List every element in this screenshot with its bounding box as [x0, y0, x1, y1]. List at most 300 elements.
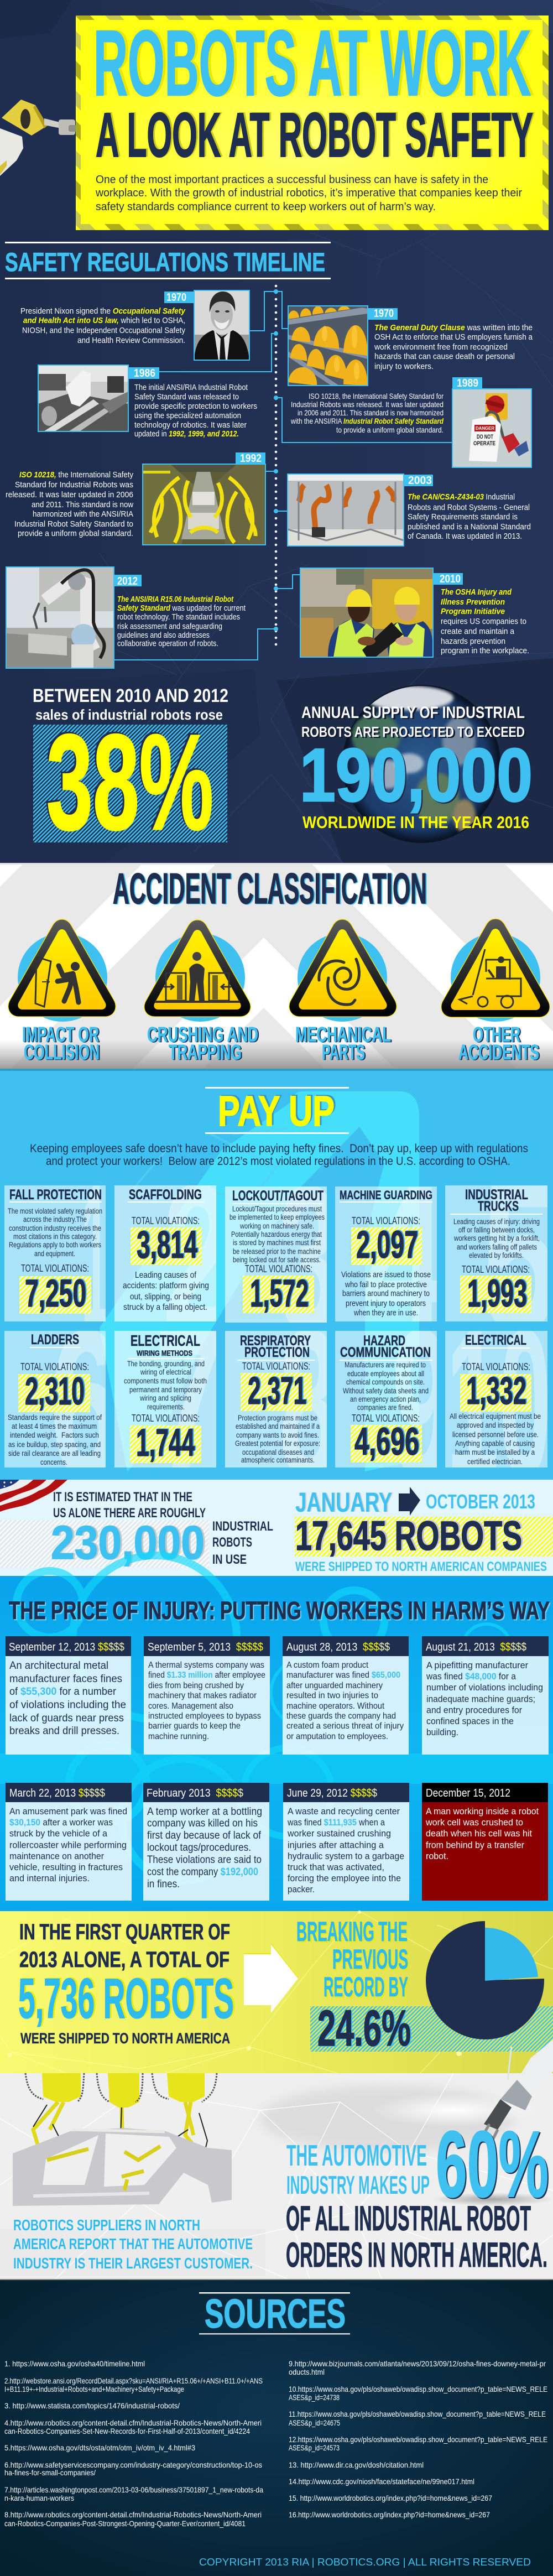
source list: right column: ASES&p_id=24573 — [289, 2443, 340, 2452]
source list: left column: I+B11.19+-+Industrial+Robots+and+Machinery+Safety+Package — [4, 2385, 184, 2393]
card description: workers getting hit by a forklift, — [453, 1234, 540, 1242]
text: initial ansi ria standard: technology of robotics. It was later — [134, 420, 247, 430]
label: impact or collision — [22, 1023, 100, 1064]
intro paragraph: One of the most important practices a successful business can have is safety in the — [96, 174, 488, 186]
violation total: TOTAL VIOLATIONS: — [132, 1413, 200, 1424]
description: A thermal systems company was — [148, 1661, 264, 1670]
description: instructed employees to bypass — [148, 1711, 261, 1721]
card: 9 hazard communication — [335, 1286, 452, 1521]
text: general duty clause: work environment free from recognized — [374, 342, 508, 352]
card description: across the industry.The — [23, 1215, 87, 1224]
card description: side rail clearance are all leading — [8, 1449, 101, 1458]
text: suppliers report automotive largest customer: ROBOTICS SUPPLIERS IN NORTH — [13, 2216, 200, 2234]
source list: right column — [289, 2359, 547, 2519]
description — [9, 1660, 126, 1737]
card description — [343, 1361, 429, 1412]
text: initial ansi ria standard — [134, 383, 257, 439]
label: impact or collision: IMPACT OR — [22, 1023, 99, 1047]
icon: mechanical parts — [289, 919, 397, 1064]
text: iso 10218: harmonized with the ANSI/RIA — [33, 509, 133, 519]
label: crushing and trapping — [147, 1023, 258, 1064]
source list: right column: 13. http://www.dir.ca.gov/dosh/citation.html — [289, 2460, 424, 2469]
description: confined spaces in the — [426, 1716, 514, 1726]
description: inadequate machine guards; — [426, 1694, 535, 1704]
stat: 24.6 percent — [310, 2000, 553, 2057]
card description: being locked out for safe access. — [233, 1256, 321, 1264]
description: number of violations including — [426, 1682, 543, 1693]
text: can csa z434 — [408, 492, 531, 541]
card description: Violations are issued to those — [341, 1271, 431, 1279]
fine card: september 5, 2013 — [144, 1636, 270, 1755]
panel: robot arm holding header sign — [0, 100, 86, 176]
card description: who fail to place protective — [345, 1281, 427, 1289]
card description: Greatest potential for exposure: — [235, 1439, 320, 1448]
stat: 38 percent sales rise — [33, 685, 228, 858]
text: iso 10218 released: ISO 10218, the International Safety Standard for — [309, 392, 444, 400]
text: iso 10218 released: to provide a uniform global standard. — [336, 425, 444, 434]
year badge: 2012: 2012 — [117, 575, 138, 587]
card description: Manufacturers are required to — [345, 1361, 426, 1369]
card description: company wants to avoid fines. — [236, 1431, 319, 1439]
panel: us robots in use and shipments — [0, 1480, 553, 1576]
text: in the first quarter — [19, 1920, 230, 1972]
violation total — [460, 1264, 531, 1315]
description — [147, 1806, 262, 1890]
card description: as ice buildup, step spacing, and — [8, 1440, 101, 1449]
text: in the first quarter: 2013 ALONE, A TOTAL OF — [19, 1948, 229, 1972]
text: ansi ria r15.06: guidelines and also addresses — [117, 631, 210, 640]
description: barrier guards to keep the — [148, 1721, 241, 1731]
description: these guards the company had — [286, 1711, 396, 1721]
text: industrial robots in use — [212, 1519, 273, 1567]
timeline entry: 1989 — [290, 377, 531, 467]
violation total — [131, 1215, 202, 1266]
label: crushing and trapping: CRUSHING AND — [147, 1023, 258, 1047]
description — [287, 1806, 404, 1895]
text: iso 10218: provide a uniform global standard. — [18, 529, 133, 538]
card description: atmospheric contaminants. — [241, 1456, 315, 1464]
card description — [450, 1412, 541, 1466]
card heading: INDUSTRIAL — [465, 1187, 528, 1203]
description: death when his cell was hit — [426, 1828, 532, 1839]
year badge: 1986: 1986 — [134, 367, 155, 379]
date and fine rating: March 22, 2013 $$$$$ — [9, 1787, 105, 1799]
card description: is stored by machines must first — [233, 1238, 321, 1247]
description: of $55,300 for a number — [9, 1686, 117, 1698]
description: injuries after attaching a — [288, 1840, 384, 1850]
card heading — [462, 1333, 530, 1349]
card description: educate employees about all — [347, 1370, 424, 1378]
date and fine rating: August 21, 2013 $$$$$ — [426, 1641, 526, 1653]
text: ansi ria r15.06: robot technology. The standard includes — [117, 612, 240, 622]
text: general duty clause: injury to workers. — [374, 362, 434, 371]
text: estimated number: US ALONE THERE ARE ROUGHLY — [53, 1506, 206, 1521]
description — [9, 1806, 127, 1883]
description: A waste and recycling center — [288, 1806, 400, 1817]
card heading — [450, 1187, 542, 1215]
card description: Leading causes of — [135, 1271, 196, 1280]
card description — [8, 1413, 102, 1466]
source list: left column: 4.http://www.robotics.org/content-detail.cfm/Industrial-Robotics-News/North-Ameri — [4, 2418, 262, 2427]
card heading: HAZARD — [363, 1333, 405, 1349]
violation total — [460, 1361, 531, 1412]
violation total — [130, 1413, 201, 1464]
description: machine running. — [148, 1732, 209, 1741]
source list: left column: 3. http://www.statista.com/topics/1476/industrial-robots/ — [4, 2401, 180, 2410]
card heading: LADDERS — [31, 1332, 79, 1347]
source list: left column: n-kara-human-workers — [4, 2494, 74, 2502]
violation total: 2,310 — [25, 1370, 85, 1413]
card description: established and maintained if a — [236, 1422, 320, 1430]
stat: 230,000: 230,000 — [51, 1517, 205, 1569]
description: work cell was crushed to — [425, 1817, 523, 1828]
card description: off or falling between docks, — [458, 1226, 535, 1234]
description: hydraulic system to a garbage — [288, 1851, 404, 1861]
description: cores. Management also — [148, 1701, 233, 1711]
label: impact or collision: COLLISION — [24, 1041, 100, 1064]
card description: Standards require the support of — [8, 1413, 102, 1422]
text: initial ansi ria standard: The initial ANSI/RIA Industrial Robot — [134, 383, 248, 392]
year badge: 2010: 2010 — [440, 573, 461, 585]
text: breaking the previous record — [296, 1916, 408, 2002]
violation total: 2,097 — [356, 1223, 418, 1266]
panel: yellow hazard title sign — [76, 11, 549, 230]
text: osha injury and illness program: program in the workplace. — [441, 646, 529, 655]
photo: workers in hard hats with clipboard — [301, 569, 432, 657]
text: osha injury and illness program — [441, 587, 529, 655]
source list: left column — [4, 2359, 263, 2528]
text: breaking the previous record: RECORD BY — [324, 1971, 408, 2002]
card description: and equipment. — [34, 1250, 75, 1258]
intro paragraph: safety standards compliance current to keep workers out of harm’s way. — [96, 201, 436, 213]
photo: collaborative robot arm — [7, 568, 113, 668]
description: resulted in two injuries to — [286, 1691, 378, 1700]
violation total — [19, 1263, 91, 1315]
text: industrial robots in use: IN USE — [212, 1552, 247, 1567]
card heading: SCAFFOLDING — [129, 1187, 202, 1203]
panel: price of injury background — [0, 1555, 553, 1911]
description: breaks and drill presses. — [9, 1725, 119, 1737]
text: iso 10218 released — [290, 392, 444, 434]
panel: automotive grey section — [0, 2073, 553, 2280]
violation total: TOTAL VIOLATIONS: — [352, 1413, 420, 1424]
text: january to october 2013 — [295, 1487, 535, 1518]
date: December 15, 2012 — [426, 1787, 510, 1799]
icon: earth globe — [342, 685, 500, 843]
text: ansi ria r15.06 — [117, 595, 246, 648]
caption: shipped to north america: WERE SHIPPED TO NORTH AMERICA — [20, 2030, 230, 2047]
source list: left column: 2.http://webstore.ansi.org/RecordDetail.aspx?sku=ANSI/RIA+R15.06+/+ANSI+B11.0+/+ANS — [4, 2376, 263, 2385]
card heading: TRUCKS — [478, 1199, 519, 1214]
subheading: sales rose: sales of industrial robots rose — [35, 706, 223, 723]
panel: sources — [0, 2279, 553, 2576]
text: general duty clause — [374, 323, 533, 371]
card description: construction industry receives the — [9, 1224, 101, 1232]
violation total: TOTAL VIOLATIONS: — [352, 1215, 420, 1226]
description: An amusement park was fined — [9, 1806, 127, 1817]
icon: other accidents forklift — [441, 919, 550, 1064]
timeline entry: 1970 general duty clause — [288, 306, 533, 386]
text: estimated number — [53, 1490, 206, 1521]
photo: president nixon — [195, 291, 249, 360]
description: from behind by a transfer — [426, 1840, 524, 1850]
card description: when they are in use. — [353, 1309, 418, 1318]
text: ansi ria r15.06: collaborative operation of robots. — [117, 639, 218, 648]
description: after unguarded machinery — [286, 1681, 383, 1690]
description: machine operators. Without — [286, 1701, 384, 1711]
car body shell — [13, 2128, 232, 2206]
card description: and workers falling off pallets — [457, 1243, 537, 1251]
icon: crushing and trapping — [144, 920, 258, 1064]
card description: prevent injury to operators — [346, 1299, 426, 1308]
card description: most citations in this category. — [13, 1232, 97, 1241]
description: struck by the vehicle of a — [9, 1828, 108, 1839]
text: iso 10218 released: with the ANSI/RIA Industrial Robot Safety Standard — [290, 417, 444, 425]
year badge: 2003: 2003 — [408, 475, 432, 487]
intro paragraph: workplace. With the growth of industrial robotics, it’s imperative that companies keep their — [95, 187, 522, 199]
description: robot. — [426, 1851, 448, 1861]
source list: left column: 7.http://articles.washingtonpost.com/2013-03-06/business/37501897_1_new-robots-da — [4, 2485, 263, 2494]
text: suppliers report automotive largest customer: INDUSTRY IS THEIR LARGEST CUSTOMER. — [13, 2255, 253, 2272]
card description — [229, 1205, 325, 1264]
violation total — [243, 1263, 314, 1315]
text: ansi ria r15.06: The ANSI/RIA R15.06 Industrial Robot — [117, 595, 234, 604]
year badge: 1970: 1970 — [166, 292, 186, 304]
photo: danger lockout tag: DANGER — [476, 426, 494, 431]
fine card: june 29, 2012 — [283, 1783, 409, 1901]
card description: wiring of electrical — [140, 1368, 191, 1376]
card heading: LOCKOUT/TAGOUT — [232, 1188, 324, 1204]
panel: accident classification background — [0, 863, 553, 1071]
text: ansi ria r15.06: risk assessment and safeguarding — [117, 622, 222, 631]
text: breaking the previous record: BREAKING THE — [296, 1916, 408, 1947]
timeline entry: 2010 — [300, 568, 529, 657]
text: iso 10218 released: Industrial Robots was released. It was later updated — [291, 400, 444, 409]
panel: navy header and timeline background — [0, 0, 553, 865]
description: $30,150 after a worker was — [9, 1817, 113, 1828]
source list: left column: 5.https://www.osha.gov/dts/osta/otm/otm_iv/otm_iv_4.html#3 — [4, 2443, 195, 2452]
card description: occupational diseases and — [242, 1448, 314, 1456]
card description — [123, 1271, 209, 1312]
card description: requirements. — [147, 1403, 185, 1411]
text: pay up intro: and protect your workers! Below are 2012’s most violated regulations in the U.S. according to OSHA. — [46, 1155, 510, 1168]
source list: left column: 8.http://www.robotics.org/content-detail.cfm/Industrial-Robotics-News/North-Ameri — [4, 2510, 262, 2519]
card heading: ELECTRICAL — [131, 1332, 200, 1349]
card description: at least 4 times the maximum — [12, 1422, 97, 1430]
violation total — [18, 1361, 90, 1413]
description: maintenance on another — [9, 1851, 104, 1861]
fatality card: december 15, 2012 — [422, 1783, 548, 1901]
description: cost the company $192,000 — [147, 1866, 258, 1878]
card description: barriers around machinery to — [342, 1289, 430, 1298]
card description: be released prior to the machine — [233, 1247, 321, 1256]
card: 8 respiratory protection — [225, 1286, 340, 1521]
heading: safety regulations timeline — [5, 242, 331, 279]
card description: permanent and temporary — [129, 1386, 202, 1394]
card description: Without safety data sheets and — [343, 1387, 429, 1395]
violation total: TOTAL VIOLATIONS: — [242, 1361, 310, 1372]
stat: automotive 60 percent — [286, 2112, 553, 2275]
description: packer. — [288, 1884, 315, 1895]
icon: impact or collision — [8, 919, 116, 1064]
card description — [124, 1360, 207, 1411]
card description: companies are fined. — [357, 1403, 413, 1412]
label: mechanical parts: MECHANICAL — [295, 1023, 391, 1047]
card description — [453, 1217, 540, 1260]
description: was fined $111,935 when a — [287, 1817, 385, 1828]
heading: safety regulations timeline: SAFETY REGULATIONS TIMELINE — [5, 248, 325, 277]
source list: left column: 6.http://www.safetyservicescompany.com/industry-category/construction/top-10-os — [4, 2460, 262, 2469]
label: crushing and trapping: TRAPPING — [169, 1041, 242, 1064]
description: vehicle, resulting in fractures — [9, 1862, 123, 1872]
source list: right column: ASES&p_id=24738 — [289, 2393, 340, 2402]
card: 5 industrial trucks — [445, 1140, 553, 1375]
description: dies from being crushed by — [148, 1681, 244, 1690]
card description: The bonding, grounding, and — [127, 1360, 205, 1368]
card: 3 lockout tagout — [225, 1141, 340, 1376]
text: initial ansi ria standard: using the specialized automation — [134, 411, 241, 420]
text: osha injury and illness program: requires US companies to — [441, 617, 526, 626]
stat: 24.6 percent: 24.6% — [317, 2000, 411, 2057]
photo: danger lockout tag: DO NOT — [477, 434, 493, 440]
label: mechanical parts — [295, 1023, 391, 1064]
fine card: february 2013 — [143, 1783, 269, 1901]
text: can csa z434: published and is a National Standard — [408, 522, 531, 532]
source list: left column: can-Robotics-Companies-Set-New-Records-for-First-Half-of-2013/content_id/4224 — [4, 2427, 250, 2436]
text: osha injury and illness program: The OSHA Injury and — [441, 587, 512, 597]
text: the automotive industry makes up — [286, 2139, 430, 2199]
illustration: robot arm gripper — [480, 2039, 553, 2146]
card description — [8, 1207, 102, 1258]
text: industrial robots in use: INDUSTRIAL — [212, 1519, 273, 1534]
card heading: FALL PROTECTION — [9, 1187, 102, 1203]
source list: left column: 1. https://www.osha.gov/osha40/timeline.html — [4, 2359, 145, 2368]
panel: first quarter 2013 yellow band — [0, 1911, 553, 2073]
card heading: MACHINE GUARDING — [340, 1188, 432, 1202]
text: general duty clause: hazards that can cause death or personal — [374, 352, 515, 361]
text: iso 10218: Standard for Industrial Robots was — [15, 480, 133, 490]
description: fined $1.33 million after employee — [148, 1671, 265, 1680]
description: worker sustained crushing — [287, 1828, 391, 1839]
card: 1 fall protection — [4, 1140, 109, 1375]
card description: struck by a falling object. — [123, 1303, 207, 1312]
text: the automotive industry makes up: THE AUTOMOTIVE — [286, 2139, 427, 2172]
card description: chemical compounds on site. — [346, 1378, 425, 1386]
card heading: RESPIRATORY — [240, 1333, 311, 1349]
description: lockout tags/procedures. — [147, 1842, 251, 1854]
text: initial ansi ria standard: provide specific protection to workers — [134, 402, 257, 411]
timeline entry: 1970 Nixon — [20, 290, 249, 360]
description: truck that was activated, — [288, 1862, 384, 1872]
panel: pay up background — [0, 1071, 553, 1480]
heading: sources: SOURCES — [205, 2292, 346, 2336]
source list: left column: ha-fines-for-small-companies/ — [4, 2468, 96, 2477]
description: of violations including the — [9, 1699, 126, 1711]
card description: Protection programs must be — [238, 1414, 317, 1422]
description: A temp worker at a bottling — [147, 1806, 262, 1818]
description: lack of guards near press — [9, 1713, 124, 1724]
card description: be implemented to keep employees — [229, 1213, 325, 1221]
card heading — [237, 1333, 315, 1361]
label: mechanical parts: PARTS — [322, 1041, 365, 1064]
text: iso 10218 released: in 2006 and 2011. This standard is now harmonized — [298, 408, 444, 417]
chart: pie 24.6 percent — [426, 1921, 544, 2039]
card description — [235, 1414, 320, 1464]
footer: copyright: COPYRIGHT 2013 RIA | ROBOTICS.ORG | ALL RIGHTS RESERVED — [199, 2557, 531, 2568]
card description: Anything capable of causing — [455, 1439, 535, 1448]
violation total: TOTAL VIOLATIONS: — [245, 1263, 312, 1274]
text: ansi ria r15.06: Safety Standard was updated for current — [117, 603, 246, 613]
fine card: august 28, 2013 — [283, 1636, 409, 1755]
card description: elevated by forklifts. — [469, 1251, 524, 1260]
text: nixon signs act: and Health Review Commission. — [77, 336, 185, 345]
text: nixon signs act: NIOSH, and the Independent Occupational Safety — [22, 326, 185, 335]
text: can csa z434: Safety Requirements standard is — [408, 512, 518, 522]
text: nixon signs act: President Nixon signed the Occupational Safety — [20, 306, 186, 316]
intro paragraph — [95, 174, 522, 213]
arrow: white pointing right — [244, 1944, 298, 2013]
text: suppliers report automotive largest customer — [13, 2216, 253, 2272]
photo: black and white industrial robot — [39, 366, 128, 431]
photo: orange robots in cell — [288, 475, 403, 545]
description: An architectural metal — [9, 1660, 108, 1672]
violation total: TOTAL VIOLATIONS: — [20, 1361, 89, 1372]
date and fine rating: September 12, 2013 $$$$$ — [9, 1641, 124, 1653]
description — [425, 1806, 539, 1861]
fine card: september 12, 2013 — [6, 1636, 131, 1755]
description: A man working inside a robot — [426, 1806, 539, 1817]
source list: right column: oducts.html — [289, 2367, 325, 2376]
description: and internal injuries. — [9, 1873, 90, 1883]
description: A custom foam product — [286, 1661, 368, 1670]
card heading: PROTECTION — [244, 1345, 310, 1360]
description — [286, 1661, 404, 1741]
card description — [341, 1271, 431, 1318]
photo: danger lockout tag: OPERATE — [473, 440, 495, 447]
description: forcing the employee into the — [288, 1873, 401, 1883]
fine card: march 22, 2013 — [6, 1783, 132, 1901]
text: osha injury and illness program: hazards prevention — [441, 637, 505, 646]
violation total: 3,814 — [137, 1223, 197, 1266]
timeline entry: 1992 — [6, 452, 265, 545]
text: iso 10218: and 2011. This standard is now — [32, 500, 133, 509]
heading: annual supply — [301, 704, 525, 740]
violation total: 1,744 — [136, 1421, 195, 1464]
card: 2 scaffolding — [114, 1140, 234, 1375]
card description: certified electrician. — [467, 1458, 523, 1466]
date and fine rating: June 29, 2012 $$$$$ — [287, 1787, 377, 1799]
description: manufacturer faces fines — [9, 1673, 122, 1685]
text: nixon signs act: and Health Act into US law, which led to OSHA, — [23, 316, 185, 325]
card description: Regulations apply to both workers — [9, 1241, 101, 1249]
source list: right column: ASES&p_id=24675 — [289, 2418, 340, 2427]
text: of all industrial robot orders — [286, 2199, 547, 2275]
card heading: WIRING METHODS — [137, 1349, 192, 1357]
description: and entry procedures for — [426, 1705, 522, 1715]
card description: licensed personnel before use. — [452, 1430, 539, 1439]
card description: wiring and splicing — [139, 1394, 191, 1402]
description: manufacturer was fined $65,000 — [286, 1671, 400, 1680]
text: suppliers report automotive largest customer: AMERICA REPORT THAT THE AUTOMOTIVE — [13, 2235, 253, 2252]
photo: yellow robots assembly line — [143, 465, 265, 544]
description — [148, 1661, 265, 1741]
photo: yellow hard hats on shelves — [289, 306, 367, 385]
violation total: 1,572 — [250, 1272, 309, 1315]
description: in fines. — [147, 1878, 180, 1890]
description: building. — [426, 1727, 458, 1737]
card description: out, slipping, or being — [130, 1292, 201, 1302]
text: iso 10218 — [6, 470, 133, 538]
